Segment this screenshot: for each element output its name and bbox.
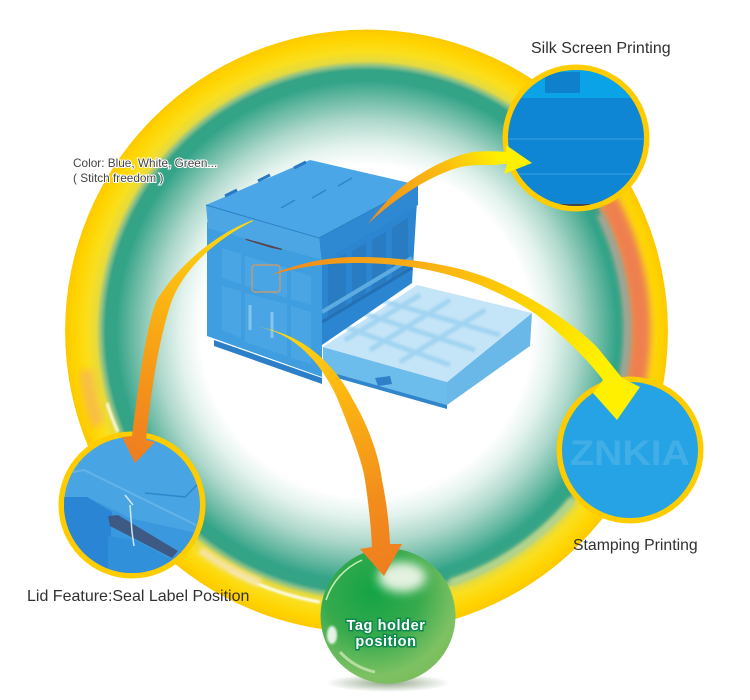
- plastic crate: [206, 160, 532, 409]
- arrow: to lid feature: [122, 220, 253, 463]
- crate right side: [320, 185, 418, 345]
- callout: seal label detail: [58, 432, 206, 590]
- heading: lid feature: Lid Feature:Seal Label Position: [27, 588, 249, 605]
- callout: stamping detail: [556, 376, 704, 524]
- gradient ring: [65, 30, 668, 632]
- callout: stamping detail: ZNKIA: [570, 434, 690, 473]
- folded crate panel: [323, 285, 532, 409]
- arrow: to tag holder: [259, 327, 402, 576]
- heading: stamping printing: Stamping Printing: [573, 537, 698, 554]
- callout: tag holder sphere: Tag holder: [346, 618, 426, 634]
- arrow: to silk screen: [368, 145, 532, 224]
- crate lid: [206, 160, 418, 262]
- callout: silk screen detail: [500, 60, 650, 215]
- heading: silk screen printing: Silk Screen Printing: [531, 40, 671, 57]
- callout: tag holder sphere: position: [355, 634, 417, 650]
- callout: tag holder sphere: [320, 548, 456, 692]
- note: colour options: Color: Blue, White, Green...: [73, 156, 217, 170]
- crate front: [207, 222, 322, 384]
- note: colour options: [73, 156, 217, 185]
- arrow: to stamping: [271, 257, 640, 420]
- tag label outline: [252, 265, 280, 292]
- note: colour options: ( Stitch freedom ): [73, 171, 164, 185]
